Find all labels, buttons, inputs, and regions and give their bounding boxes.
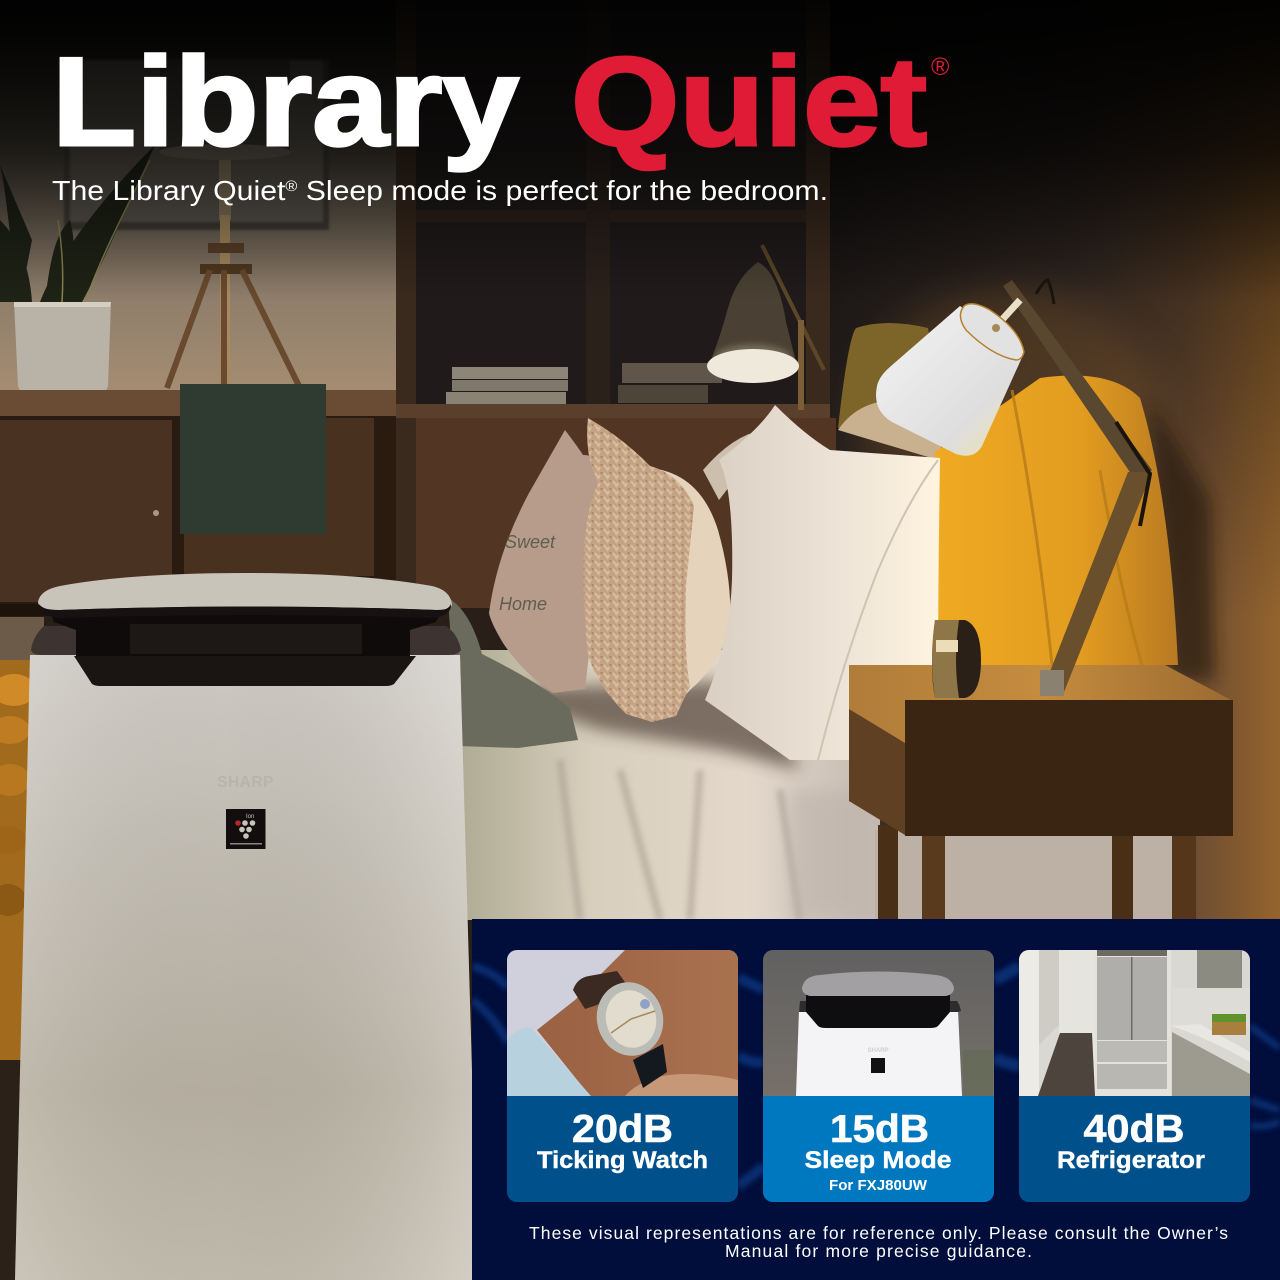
right wall: [826, 0, 1280, 920]
refrigerator label block: [1019, 1096, 1250, 1202]
pale cushion behind lamp: [838, 400, 948, 460]
title: Library: [52, 31, 519, 172]
purifier photo: SHARP: [867, 1048, 889, 1054]
shaggy pillow: [584, 418, 730, 722]
air purifier: [15, 573, 478, 1280]
subtitle: Sleep mode is perfect for the bedroom.: [297, 175, 828, 206]
panel: noise comparison: [472, 919, 1280, 1280]
table lamp: [876, 280, 1152, 696]
pillow lettering: Sweet: [505, 532, 556, 552]
card: refrigerator: [1019, 950, 1250, 1202]
card: ticking watch: [507, 950, 738, 1202]
bed sheets: [440, 650, 880, 920]
white pillow: [703, 405, 940, 760]
kitchen photo: [1019, 950, 1250, 1096]
vent collar: [31, 626, 461, 655]
picture frame: [64, 60, 329, 230]
sleep mode label block: [763, 1096, 994, 1202]
shelving unit: [396, 0, 836, 610]
orange knit throw: [0, 617, 44, 1280]
left wall: [0, 0, 396, 395]
books: [446, 363, 722, 404]
subtitle: ®: [285, 178, 297, 195]
watch label block: [507, 1096, 738, 1202]
refrigerator caption: Refrigerator: [1057, 1147, 1205, 1174]
vent inner panel: [130, 624, 362, 654]
panel background: [472, 919, 1280, 1280]
lid rim: [39, 604, 451, 618]
cushion seam: [1012, 390, 1142, 665]
vent trapezoid: [74, 656, 416, 686]
refrigerator decibel value: 40dB: [1084, 1108, 1184, 1151]
back cushion: [838, 323, 938, 448]
pillow lettering: Home: [499, 594, 547, 614]
alarm clock: [932, 620, 981, 698]
shadow behind cushion: [1150, 400, 1215, 680]
title: Quiet: [571, 31, 927, 172]
yellow cushion: [935, 376, 1178, 665]
title: ®: [931, 53, 950, 81]
nightstand: [849, 665, 1233, 920]
top lid: [38, 573, 452, 610]
wave decoration: [472, 966, 1280, 1186]
left pillow: [489, 430, 611, 693]
purifier photo: [763, 950, 994, 1096]
body shading: [15, 655, 478, 1280]
warm glow: [860, 290, 1160, 550]
purifier body: [15, 655, 478, 1280]
watch caption: Ticking Watch: [537, 1147, 708, 1174]
tripod lamp: [159, 60, 300, 392]
throw blanket: [448, 598, 578, 748]
dresser: [0, 390, 396, 616]
top darkening overlay: [0, 0, 1280, 300]
vent opening: [48, 606, 444, 656]
brand name: SHARP: [217, 774, 274, 791]
disclaimer: Manual for more precise guidance.: [725, 1241, 1032, 1261]
right wall vertical shading: [826, 0, 1280, 620]
towel: [180, 384, 326, 534]
watch photo: [507, 950, 738, 1096]
card: sleep mode: [763, 950, 994, 1202]
watch decibel value: 20dB: [572, 1108, 673, 1151]
subtitle: The Library Quiet: [52, 175, 268, 206]
plant in pot: [0, 145, 155, 394]
mattress skirt under table: [875, 830, 1195, 920]
plasmacluster badge: [226, 809, 266, 849]
model note: For FXJ80UW: [829, 1177, 928, 1194]
disclaimer: [529, 1223, 1228, 1261]
title: [52, 31, 950, 172]
sleep mode caption: Sleep Mode: [804, 1147, 952, 1174]
desk lamp on shelf: [707, 245, 824, 410]
pillow lettering: [499, 532, 556, 614]
disclaimer: These visual representations are for reference only. Please consult the Owner’s: [529, 1223, 1228, 1243]
plasmacluster badge: Ion: [246, 814, 254, 820]
sleep mode decibel value: 15dB: [830, 1108, 929, 1151]
